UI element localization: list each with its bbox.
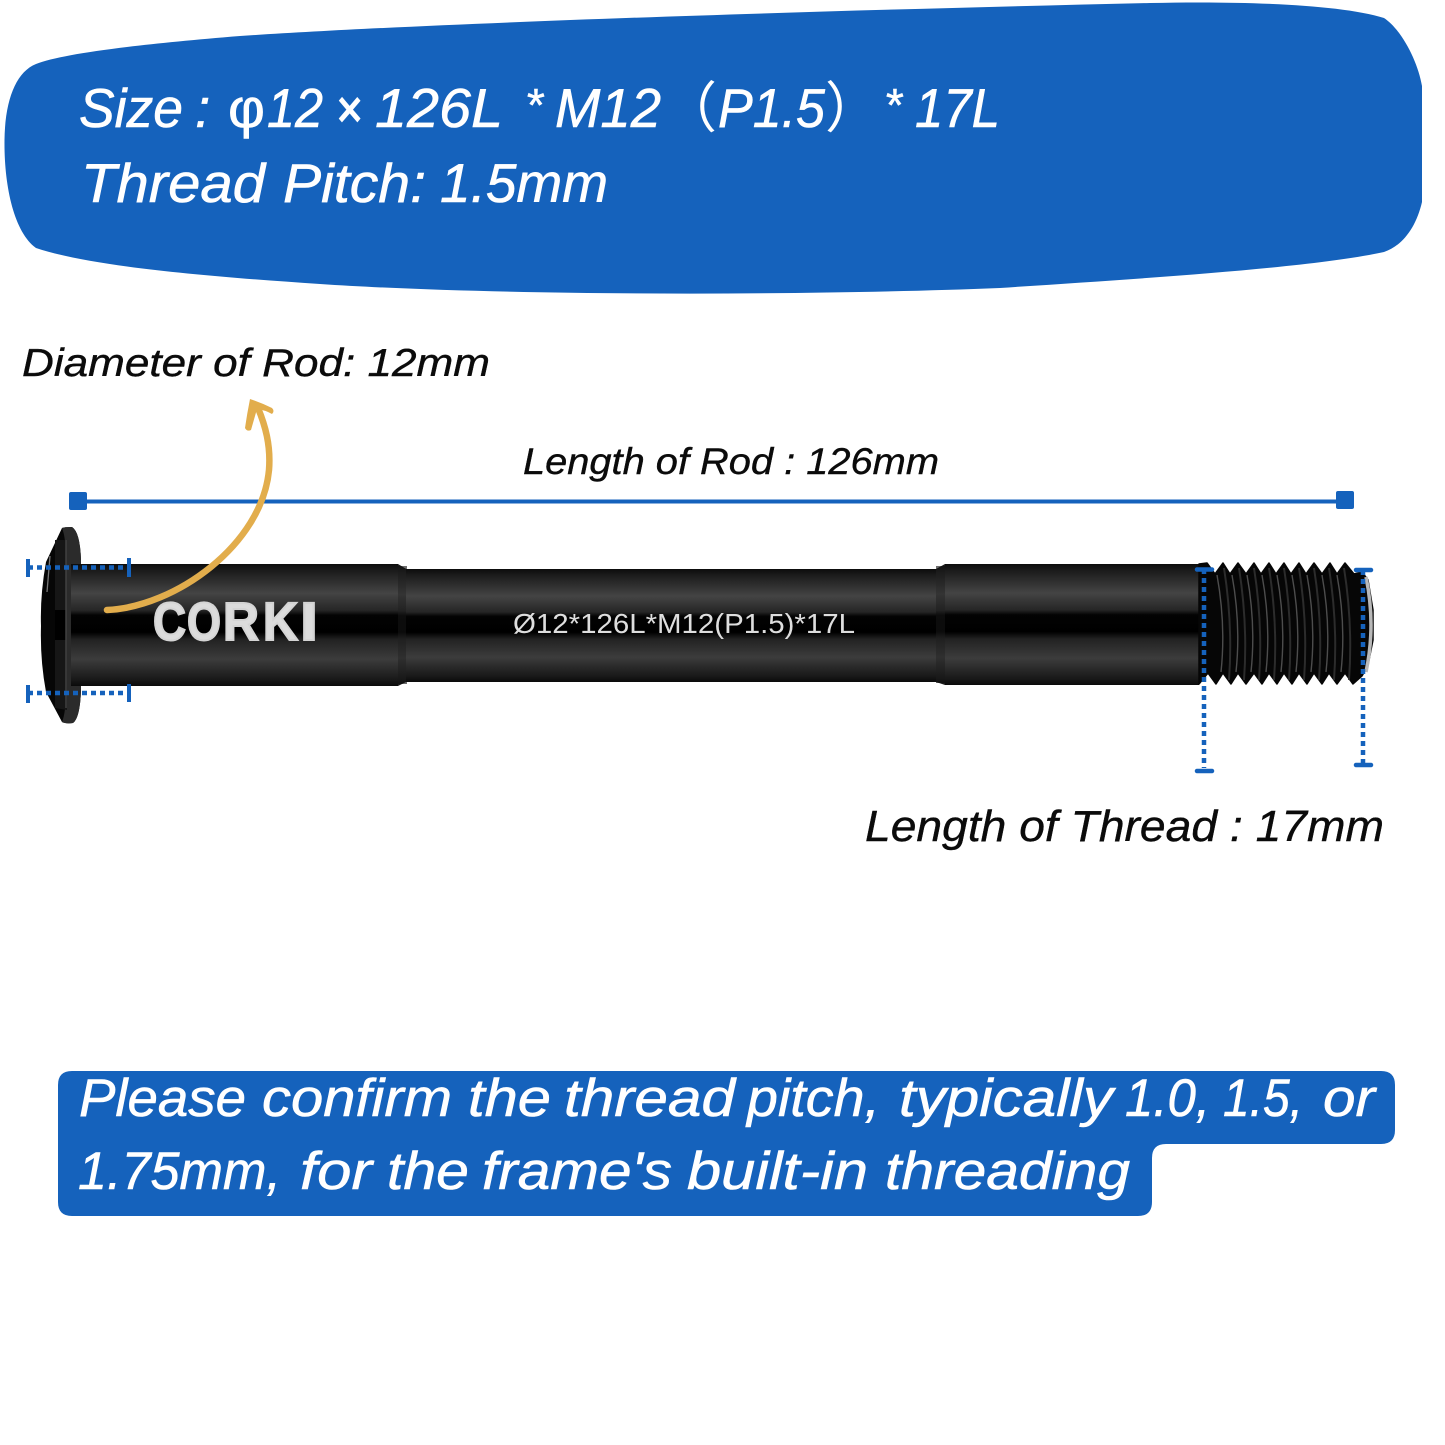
heading: thread pitch [81,152,608,214]
label: length of thread: Length of Thread : 17mm [865,802,1384,851]
engraved logo: CORKI: K [263,592,298,652]
engraved logo: CORKI [153,592,318,652]
dimension line: rod length [69,491,1354,510]
engraved logo: CORKI: C [153,592,186,652]
callout text line 1: 1.0, [1125,1069,1210,1128]
callout text line 1: confirm [262,1069,452,1128]
engraved logo: CORKI: R [223,592,259,652]
engraved logo: CORKI: I [300,592,318,652]
dimension marker: rod diameter [28,558,129,703]
callout text line 1 [79,1069,1378,1128]
callout text line 2: for [300,1142,375,1201]
callout text line 1: the [468,1069,551,1128]
heading: thread pitch: Pitch: [283,152,426,214]
callout text line 1: thread [564,1069,737,1128]
product photo: black thru-axle rod [41,527,1373,723]
callout: thread pitch note [58,1069,1395,1216]
callout text line 2: frame's [482,1142,672,1201]
heading: size specification: ） [825,63,880,143]
label: diameter of rod: Diameter of Rod: 12mm [22,342,490,385]
heading: size specification: 17L [915,77,1000,139]
heading: size specification: M12 [555,77,661,139]
heading: size specification: 126L [375,77,503,139]
heading: size specification: 12 [267,77,323,139]
callout text line 2: 1.75mm, [78,1142,281,1201]
heading: size specification: * [884,79,904,131]
heading: size specification: Size [79,77,183,139]
callout text line 1: 1.5, [1223,1069,1303,1128]
flanged head [41,527,81,723]
callout text line 2 [78,1142,1131,1201]
threaded end [1199,563,1373,684]
label: length of rod: Length of Rod : 126mm [523,441,939,482]
engraved logo: CORKI: O [187,592,221,652]
callout text line 1: or [1323,1069,1378,1128]
heading: size specification: （ [662,63,717,143]
heading: thread pitch: Thread [81,152,268,214]
callout text line 1: Please [79,1069,246,1128]
rod shaft segments [71,564,1199,686]
arrow: diameter pointer [107,399,274,610]
heading: size specification: * [525,79,545,131]
callout text line 2: built-in [687,1142,868,1201]
heading: size specification [79,63,1000,143]
dimension marker: thread length [1197,569,1371,771]
heading: size specification: : [195,77,210,139]
callout text line 2: threading [885,1142,1131,1201]
panel: size banner [4,2,1422,294]
callout text line 2: the [387,1142,469,1201]
heading: size specification: φ [228,77,265,139]
heading: size specification: × [336,81,362,139]
heading: size specification: P1.5 [718,77,825,139]
callout text line 1: typically [899,1069,1117,1128]
engraved size text: Ø12*126L*M12(P1.5)*17L [513,608,855,639]
heading: thread pitch: 1.5mm [440,152,608,214]
callout text line 1: pitch, [745,1069,880,1128]
